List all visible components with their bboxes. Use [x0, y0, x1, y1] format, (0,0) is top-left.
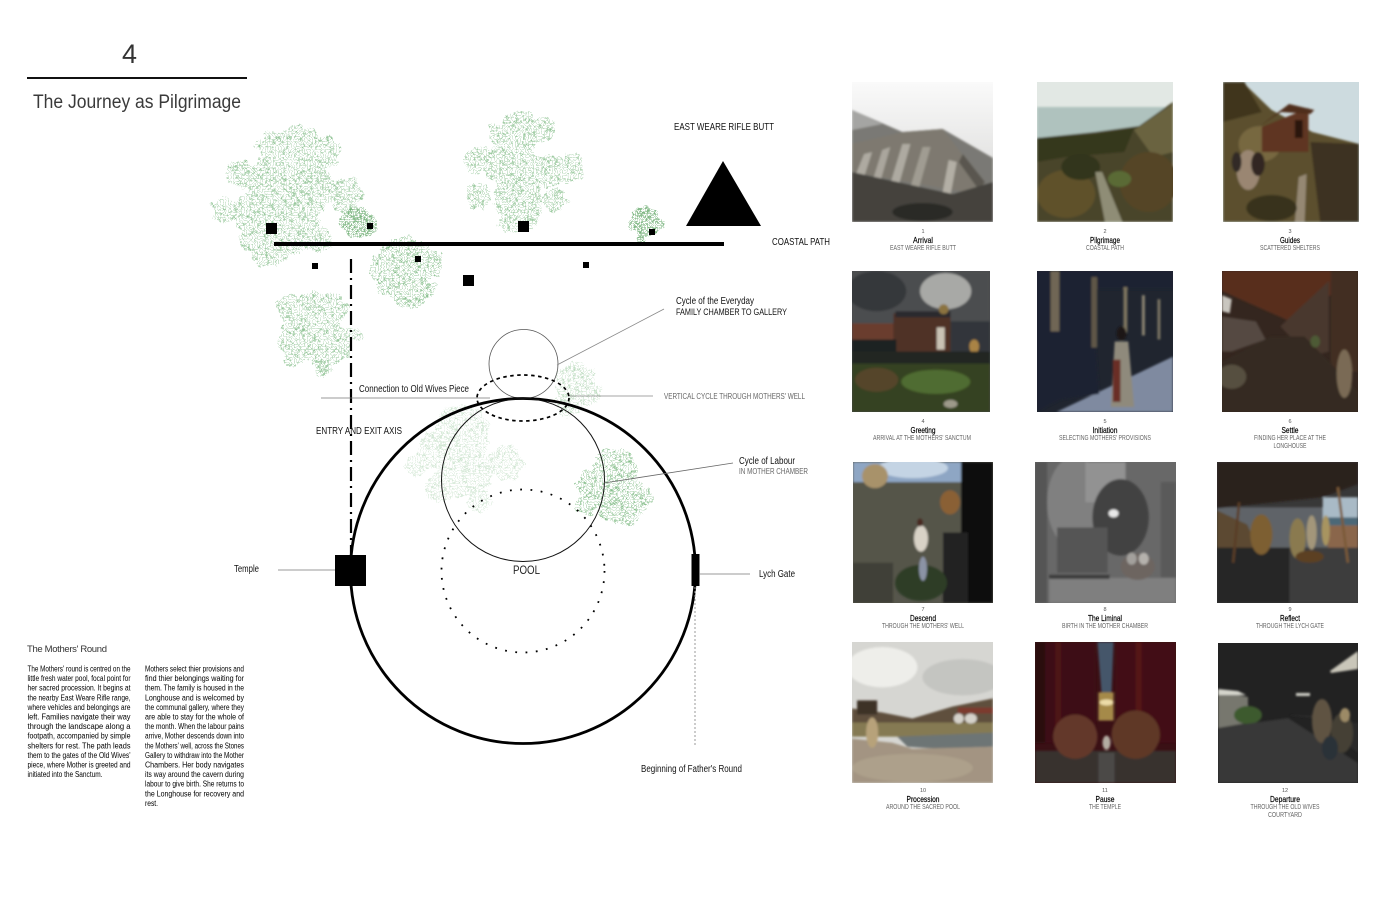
father's round dotted line: [694, 587, 696, 745]
panel: 10 procession: [847, 642, 1003, 811]
photo: lych gate shelter: [1217, 462, 1358, 603]
diagram labels: VERTICAL CYCLE THROUGH MOTHERS' WELL: [664, 391, 805, 401]
diagram labels: Lych Gate: [759, 569, 795, 580]
text column one: them to the gates of the Old Wives': [28, 751, 131, 760]
caption: BIRTH IN THE MOTHER CHAMBER: [1062, 623, 1148, 630]
photo: sacred pool: [852, 642, 993, 783]
caption: [873, 419, 971, 442]
tree canopies: [212, 111, 665, 527]
panel: 1 arrival: [852, 82, 993, 252]
caption: 3: [1288, 229, 1292, 235]
photo: temple curtains: [1035, 642, 1176, 783]
lych gate: [692, 554, 700, 586]
panel: 3 guides: [1223, 82, 1359, 252]
photo: dark corridor with figure: [1037, 271, 1173, 412]
caption: The Liminal: [1088, 613, 1122, 623]
caption: SELECTING MOTHERS' PROVISIONS: [1059, 435, 1151, 442]
caption: [882, 607, 964, 630]
panel: 11 pause: [1035, 642, 1176, 811]
caption: [1254, 419, 1326, 450]
text column one: initiated into the Sanctum.: [28, 770, 102, 779]
caption: [1260, 229, 1320, 252]
panel: 5 initiation: [1037, 271, 1173, 442]
photo: mothers' well descent: [853, 462, 993, 603]
text column two: are able to stay for the whole of: [145, 712, 245, 722]
text block: The Mothers' Round: [27, 644, 245, 808]
text column one: [27, 664, 131, 779]
text column one: left. Families navigate their way: [28, 712, 130, 722]
diagram labels: [234, 122, 830, 775]
text column one: shelters for rest. The path leads: [28, 741, 130, 750]
cycle of the everyday circle: [489, 330, 558, 398]
caption: [1256, 607, 1324, 630]
photo: shelter on hillside: [1223, 82, 1359, 222]
caption: [1062, 607, 1148, 630]
text column two: the Longhouse for recovery and: [145, 789, 244, 798]
caption: THROUGH THE LYCH GATE: [1256, 623, 1324, 630]
mothers' round main circle: [350, 398, 696, 744]
diagram labels: EAST WEARE RIFLE BUTT: [674, 122, 774, 133]
panel: 4 greeting: [847, 271, 990, 442]
caption: [886, 788, 960, 811]
text column one: footpath, accompanied by simple: [28, 732, 131, 741]
text column one: where vehicles and belongings are: [27, 703, 131, 712]
diagram labels: Temple: [234, 564, 259, 575]
text heading: The Mothers' Round: [27, 644, 107, 655]
caption: THE TEMPLE: [1089, 804, 1121, 811]
diagram labels: IN MOTHER CHAMBER: [739, 466, 808, 476]
caption: Greeting: [910, 425, 936, 435]
caption: 12: [1282, 788, 1288, 794]
title rule: [27, 77, 247, 79]
caption: COASTAL PATH: [1086, 245, 1124, 252]
caption: Pilgrimage: [1090, 235, 1120, 245]
caption: Settle: [1282, 425, 1299, 435]
caption: 9: [1288, 607, 1292, 613]
caption: 11: [1102, 788, 1108, 794]
caption: [1059, 419, 1151, 442]
text column two: Mothers select thier provisions and: [145, 664, 244, 674]
labour leader: [604, 463, 733, 483]
text column one: through the landscape along a: [28, 722, 131, 731]
text column two: its way around the cavern during: [145, 770, 244, 779]
text column two: [145, 664, 245, 808]
photo: birth chamber cavern: [1035, 462, 1176, 603]
caption: [1250, 788, 1320, 819]
lych gate leader: [699, 573, 750, 575]
caption: THROUGH THE OLD WIVES: [1250, 804, 1320, 811]
text column two: labour to give birth. She returns to: [145, 780, 244, 789]
caption: Guides: [1280, 235, 1300, 245]
site diagram: [212, 111, 830, 775]
caption: 8: [1103, 607, 1107, 613]
vertical cycle leader: [568, 395, 653, 397]
text column two: Gallery to withdraw into the Mother: [145, 751, 244, 760]
coastal path: [274, 242, 724, 246]
text column two: the Mothers' well, across the Stones: [145, 741, 244, 750]
caption: LONGHOUSE: [1274, 443, 1307, 450]
photo: sanctum entrance: [852, 271, 990, 412]
icon: east weare rifle butt triangle: [686, 161, 761, 226]
everyday leader: [557, 309, 664, 365]
caption: 7: [921, 607, 925, 613]
caption: [1089, 788, 1121, 811]
text column one: The Mothers' round is centred on the: [28, 664, 131, 674]
connection line: [321, 397, 490, 399]
text column two: find thier belongings waiting for: [145, 674, 244, 683]
temple leader: [278, 569, 335, 571]
diagram labels: Beginning of Father's Round: [641, 764, 742, 775]
mothers' well dashed ellipse: [477, 375, 569, 421]
text column one: the nearby East Weare Rifle range,: [28, 693, 130, 702]
panel: 9 reflect: [1217, 462, 1358, 630]
entry and exit axis: [350, 259, 352, 555]
temple: [335, 555, 366, 586]
diagram labels: COASTAL PATH: [772, 237, 830, 248]
caption: Pause: [1096, 794, 1115, 804]
pool dotted circle: [442, 490, 604, 652]
caption: ARRIVAL AT THE MOTHERS' SANCTUM: [873, 435, 971, 442]
caption: AROUND THE SACRED POOL: [886, 804, 960, 811]
text column two: rest.: [145, 799, 158, 808]
photo: longhouse gallery: [1222, 271, 1358, 412]
text column two: the month. When the labour pains: [145, 722, 244, 731]
caption: 6: [1288, 419, 1292, 425]
text column two: arrive, Mother descends down into: [145, 732, 244, 741]
diagram labels: ENTRY AND EXIT AXIS: [316, 426, 402, 437]
panel: 6 settle: [1217, 271, 1358, 450]
text column one: her sacred procession. It begins at: [28, 684, 131, 693]
title: The Journey as Pilgrimage: [33, 92, 241, 113]
caption: SCATTERED SHELTERS: [1260, 245, 1320, 252]
diagram labels: Cycle of Labour: [739, 456, 796, 467]
caption: Descend: [910, 613, 936, 623]
caption: Arrival: [913, 235, 933, 245]
shelters along the path: [266, 221, 655, 286]
caption: Procession: [906, 794, 940, 804]
caption: Departure: [1270, 794, 1300, 804]
photo: old wives courtyard: [1218, 643, 1358, 783]
panel: 12 departure: [1218, 643, 1358, 819]
section number: 4: [122, 39, 137, 69]
text column two: the communal gallery, where they: [145, 703, 244, 712]
caption: THROUGH THE MOTHERS' WELL: [882, 623, 964, 630]
panel: 8 the liminal: [1035, 456, 1176, 630]
caption: 10: [920, 788, 926, 794]
text column one: piece, where Mother is greeted and: [28, 760, 130, 770]
diagram labels: POOL: [513, 563, 540, 577]
text column two: Longhouse and is welcomed by: [145, 693, 244, 702]
caption: Reflect: [1280, 613, 1300, 623]
cycle of labour circle: [442, 398, 604, 562]
text column two: them. The family is housed in the: [145, 684, 244, 693]
caption: 1: [921, 229, 925, 235]
diagram labels: Connection to Old Wives Piece: [359, 384, 469, 395]
panel: 7 descend: [853, 458, 993, 630]
photo: coastal path: [1037, 82, 1173, 222]
caption: 5: [1103, 419, 1107, 425]
caption: [1086, 229, 1124, 252]
caption: EAST WEARE RIFLE BUTT: [890, 245, 957, 252]
caption: 2: [1103, 229, 1107, 235]
caption: Initiation: [1092, 425, 1118, 435]
caption: [890, 229, 957, 252]
caption: 4: [921, 419, 925, 425]
diagram labels: FAMILY CHAMBER TO GALLERY: [676, 307, 787, 317]
caption: FINDING HER PLACE AT THE: [1254, 435, 1326, 442]
diagram labels: Cycle of the Everyday: [676, 296, 754, 307]
photo: rifle butt in fog: [852, 92, 993, 222]
caption: COURTYARD: [1268, 812, 1302, 819]
text column one: little fresh water pool, focal point for: [28, 674, 131, 683]
text column two: Chambers. Her body navigates: [145, 760, 244, 770]
panel: 2 pilgrimage: [1037, 82, 1178, 252]
